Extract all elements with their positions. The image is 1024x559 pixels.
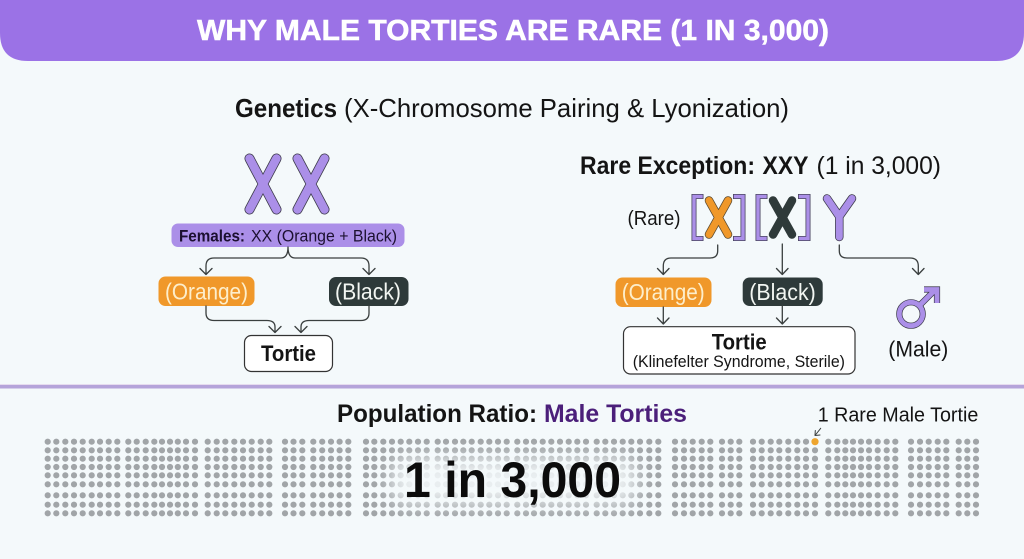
icon: black X: [773, 200, 792, 234]
heading: rare exception: Rare Exception:: [580, 152, 755, 180]
arrow: to rare dot: [815, 428, 821, 436]
label: females XX: XX (Orange + Black): [251, 226, 397, 246]
icon: Y chromosome: [827, 198, 852, 237]
box: tortie, Klinefelter syndrome: (Klinefelter Syndrome, Sterile): [633, 352, 845, 371]
heading: population ratio: Population Ratio:: [337, 400, 537, 428]
icon: XX chromosomes: [250, 158, 324, 210]
section heading: genetics: (X-Chromosome Pairing & Lyonization): [344, 93, 789, 123]
arrows: XX to orange and black: [200, 247, 375, 274]
panel: population ratio: [48, 400, 978, 513]
section heading: genetics: Genetics: [235, 93, 337, 123]
label: rare: (Rare): [628, 208, 680, 230]
heading: rare exception: XXY: [762, 152, 809, 180]
heading: rare exception: [580, 152, 941, 180]
highlighted dot: rare male tortie: [811, 438, 819, 445]
heading: population ratio: Male Torties: [544, 400, 687, 428]
panel: rare exception XXY: [580, 152, 948, 374]
pill: orange: (Orange): [622, 279, 705, 305]
pill: orange: (Orange): [165, 278, 248, 304]
icon: brackets: [694, 196, 808, 238]
box: tortie: Tortie: [261, 341, 316, 366]
pill: black: (Black): [749, 279, 816, 305]
icon: orange X: [709, 200, 728, 234]
arrows: chromosomes to outcomes: [658, 244, 924, 274]
heading: population ratio: [337, 400, 687, 428]
heading: rare exception: (1 in 3,000): [816, 152, 941, 180]
dot grid population: [48, 442, 976, 513]
panel: females XX: [158, 158, 408, 372]
pill: black: (Black): [335, 278, 401, 304]
arrows: pills to tortie box: [658, 306, 788, 324]
box: tortie, Klinefelter syndrome: [624, 327, 855, 374]
icon: male symbol: [899, 290, 937, 326]
label: male: (Male): [888, 337, 948, 362]
label: 1 rare male tortie: 1 Rare Male Tortie: [818, 405, 978, 427]
arrows: orange and black to tortie: [206, 306, 369, 332]
box: tortie: [244, 336, 332, 372]
box: tortie, Klinefelter syndrome: Tortie: [712, 330, 767, 354]
label: females XX: [172, 224, 404, 247]
header banner: [0, 0, 1024, 61]
label: females XX: Females:: [179, 226, 245, 246]
title: WHY MALE TORTIES ARE RARE (1 IN 3,000): [197, 15, 829, 47]
big number: 1 in 3,000: [404, 452, 621, 508]
